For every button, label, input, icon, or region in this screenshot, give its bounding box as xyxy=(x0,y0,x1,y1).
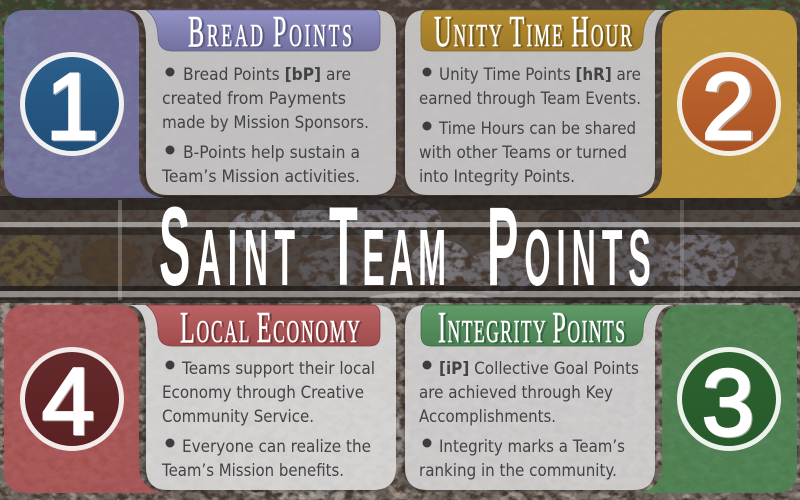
body text: Time Hours can be shared xyxy=(438,119,636,139)
number badge 3: 3 xyxy=(702,350,754,456)
body text: Everyone can realize the xyxy=(182,437,371,457)
heading: BREAD POINTS xyxy=(188,6,352,56)
number badge 2 xyxy=(680,54,778,161)
number badge 4: 4 xyxy=(43,350,95,456)
panel: Local Economy xyxy=(4,302,396,493)
body text: Accomplishments. xyxy=(419,407,556,427)
number badge 3 xyxy=(680,350,778,457)
text card xyxy=(405,302,673,490)
number badge 4 xyxy=(22,349,122,456)
body text: Teams support their local xyxy=(181,359,375,379)
title: TEAM xyxy=(329,185,446,310)
number badge 2: 2 xyxy=(704,55,756,161)
body text: Economy through Creative xyxy=(162,383,364,403)
number badge 2: 2 xyxy=(702,54,754,160)
body text: ranking in the community. xyxy=(419,461,617,481)
band strips xyxy=(0,196,800,210)
panel: Integrity Points xyxy=(405,302,797,493)
body text: [iP] Collective Goal Points xyxy=(439,359,639,379)
body text xyxy=(161,359,375,481)
body text: Team’s Mission benefits. xyxy=(161,461,344,481)
body text: Community Service. xyxy=(162,407,314,427)
body text: made by Mission Sponsors. xyxy=(162,113,369,133)
panel: Unity Time Hour xyxy=(405,6,797,198)
body text xyxy=(161,65,369,187)
body text: B-Points help sustain a xyxy=(183,143,360,163)
body text: Bread Points [bP] are xyxy=(183,65,351,85)
number badge 1: 1 xyxy=(46,54,98,160)
stones in the lower region xyxy=(0,290,800,500)
heading banner xyxy=(421,305,655,346)
title: SAINT xyxy=(159,185,295,310)
stones in the middle band xyxy=(0,198,800,294)
number badge 1: 1 xyxy=(47,55,100,161)
heading banner xyxy=(146,10,380,51)
text card xyxy=(128,6,396,195)
body text xyxy=(419,65,641,187)
body text: are achieved through Key xyxy=(419,383,613,403)
heading: LOCAL ECONOMY xyxy=(180,302,360,352)
badge panel: red xyxy=(4,305,165,493)
body text: with other Teams or turned xyxy=(419,143,627,163)
body text: Unity Time Points [hR] are xyxy=(439,65,641,85)
badge panel: purple xyxy=(4,10,165,198)
body text: earned through Team Events. xyxy=(419,89,641,109)
badge panel: gold xyxy=(636,10,797,198)
text card xyxy=(405,6,673,195)
body text: into Integrity Points. xyxy=(419,167,575,187)
heading: UNITY TIME HOUR xyxy=(434,6,633,56)
body text: Integrity marks a Team’s xyxy=(439,437,625,457)
number badge 1 xyxy=(22,54,122,161)
body text: Team’s Mission activities. xyxy=(161,167,360,187)
body text: created from Payments xyxy=(162,89,346,109)
heading: INTEGRITY POINTS xyxy=(438,302,625,352)
heading banner xyxy=(146,305,380,346)
badge panel: green xyxy=(636,305,797,493)
text card xyxy=(128,302,396,490)
title xyxy=(159,185,651,310)
number badge 3: 3 xyxy=(703,351,755,457)
panel: Bread Points xyxy=(4,6,396,198)
body text xyxy=(419,359,639,481)
title: POINTS xyxy=(487,185,651,310)
plants xyxy=(0,0,38,150)
heading banner xyxy=(421,10,655,51)
number badge 4: 4 xyxy=(42,349,94,455)
